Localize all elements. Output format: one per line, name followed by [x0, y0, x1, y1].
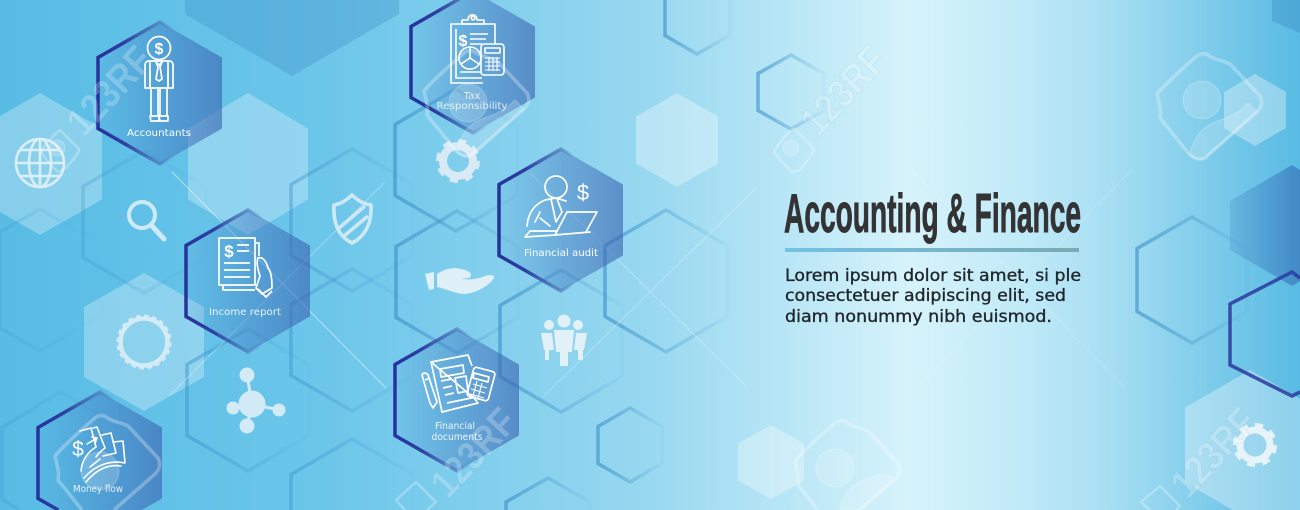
watermark: 123RF text: 123RF [422, 400, 526, 506]
title underline [785, 248, 1079, 252]
icon: ring gear [118, 316, 170, 368]
body text [785, 266, 1081, 326]
icon: globe [16, 139, 64, 187]
icon: documents, pen and calculator [422, 355, 496, 412]
label: financial documents: Financial [435, 421, 475, 432]
label: income report: Income report [209, 307, 281, 318]
icon: magnifier [129, 202, 164, 239]
label: accountants: Accountants [127, 128, 191, 139]
watermark: 123RF text: 123RF [792, 38, 896, 144]
panel: tax responsibility: Responsibility [436, 101, 508, 112]
panel: money flow [38, 392, 162, 510]
icon: clipboard with calculator [451, 15, 504, 83]
icon: report held by hand [219, 238, 272, 297]
panel: financial documents: documents [432, 432, 483, 443]
panel: financial audit [499, 149, 623, 291]
label: money flow: Money flow [73, 484, 123, 495]
label: financial audit: Financial audit [524, 248, 598, 259]
icon: auditor at laptop [525, 176, 597, 237]
thin white diagonal lines [170, 170, 1132, 397]
watermark: stamp centres [49, 81, 1257, 510]
icon: open hand [425, 268, 494, 294]
panel: accountants [98, 22, 222, 164]
icon: molecule network [227, 368, 285, 433]
body text: Lorem ipsum dolor sit amet, si ple [785, 266, 1081, 285]
icon: clipboard with calculator: $ [459, 33, 468, 50]
icon: money flow [80, 427, 125, 482]
icon: cog under tax hexagon [438, 142, 478, 180]
body text: diam nonummy nibh euismod. [785, 307, 1052, 326]
watermark: 123RF text: 123RF [1162, 400, 1266, 506]
panel: income report [186, 210, 310, 352]
icon: dollar sign: $ [72, 438, 84, 461]
right edge navy hexagon [1230, 272, 1300, 396]
icon: dollar sign: $ [577, 180, 589, 205]
watermark: 123RF text: 123RF [58, 38, 162, 144]
panel: financial documents [395, 329, 519, 471]
panel: tax responsibility [411, 0, 535, 133]
icon: team of people [541, 314, 587, 366]
darker background hexagons [185, 0, 1300, 286]
icon: right-side cog [1236, 426, 1274, 464]
icon: shield [334, 195, 371, 243]
body text: consectetuer adipiscing elit, sed [785, 286, 1066, 305]
icon: report held by hand: $ [224, 242, 234, 261]
icon: accountant figure: $ [155, 41, 164, 58]
label: tax responsibility: Tax [462, 91, 481, 102]
icon: accountant figure [145, 36, 173, 121]
